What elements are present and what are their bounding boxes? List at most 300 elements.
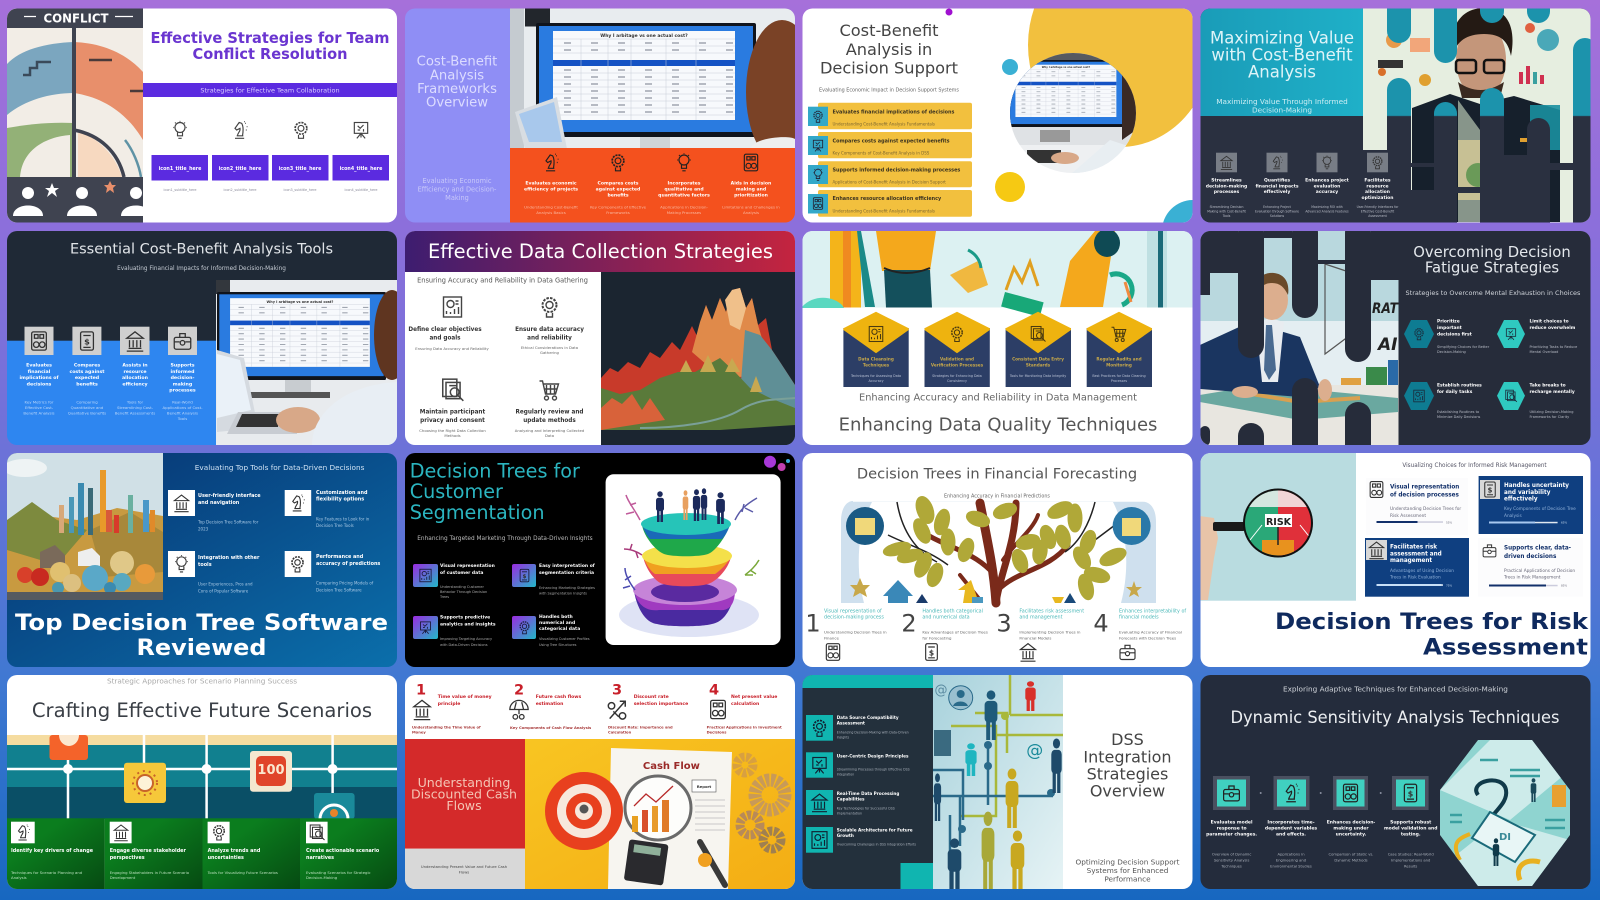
key points: qualitative and — [664, 186, 704, 192]
key points: Regularly review and — [516, 410, 583, 416]
key points: for daily tasks — [1437, 389, 1473, 395]
four diamond cards: Techniques — [863, 362, 890, 367]
sub points: with Segmentation Insights — [539, 592, 587, 596]
key points: Supports — [170, 362, 195, 368]
sub points — [1212, 852, 1434, 868]
key points: Incorporates — [668, 180, 701, 186]
key points — [1206, 178, 1393, 201]
key points: Visual representation — [440, 563, 495, 569]
sub points: Gathering — [540, 350, 560, 355]
cards: Handles uncertainty — [1504, 483, 1569, 489]
list of rows: Applications of Cost-Benefit Analysis in Decision Support — [832, 180, 946, 184]
sub points: with Data-Driven Decisions — [440, 643, 488, 647]
title: Overcoming Decision — [1413, 244, 1571, 261]
list of rows: Enhances resource allocation efficiency — [832, 196, 942, 202]
sub points: Engineering and — [1276, 858, 1306, 862]
key points: tools — [198, 562, 212, 568]
title: Segmentation — [410, 501, 545, 524]
illustration: conflict — [7, 8, 151, 223]
icon subtitles: icon2_subtitle_here — [224, 188, 256, 192]
key points: categorical data — [539, 626, 580, 632]
dark pill overlays — [1200, 220, 1398, 463]
key points: numerical and — [539, 620, 575, 626]
subtitle: Evaluating Economic — [423, 177, 492, 185]
subtitle: Evaluating Economic Impact in Decision Support Systems — [819, 88, 959, 94]
panel: future scenarios — [7, 675, 397, 889]
key points: Visual representation of — [824, 608, 882, 614]
icons — [546, 153, 758, 171]
sub points: Key Components of Effective — [590, 204, 647, 210]
key points: uncertainties — [208, 855, 244, 861]
key points: efficiency — [122, 381, 148, 387]
red title block — [405, 739, 525, 849]
sub points: Prioritizing Tasks to Reduce — [1530, 345, 1577, 349]
sub points — [524, 206, 780, 214]
title: Integration — [1083, 748, 1172, 766]
sub points — [824, 630, 1182, 640]
icons — [414, 700, 725, 720]
cards: 65% — [1561, 520, 1568, 524]
sub points: 2023 — [198, 526, 209, 532]
sub points: Techniques — [1220, 864, 1242, 868]
key points: of customer data — [440, 570, 483, 576]
key points: making under — [1333, 825, 1369, 831]
title: Fatigue Strategies — [1425, 260, 1559, 276]
four diamond cards: Techniques for Assessing Data — [850, 374, 901, 378]
title banner — [405, 231, 795, 272]
key points: resource — [1366, 183, 1389, 189]
four diamond cards: Validation and — [940, 356, 974, 361]
key points: financial models — [1119, 614, 1159, 620]
sub points: Enhancing Project — [1263, 205, 1292, 209]
sub points: Qualitative Benefits — [68, 410, 106, 416]
key points: model validation and — [1384, 825, 1437, 831]
sub points: Cons of Popular Software — [198, 588, 249, 594]
key points: Discount rate — [634, 694, 669, 700]
panel: dynamic sensitivity analysis — [1200, 675, 1590, 889]
key points: allocation — [1365, 189, 1390, 195]
key points: Quantifies — [1264, 178, 1290, 184]
image: octagon isometric analysis: DI — [1499, 832, 1511, 843]
key points: Capabilities — [837, 796, 865, 802]
key points: segmentation criteria — [539, 570, 594, 576]
red title block: Discounted Cash — [411, 786, 517, 802]
sub points: Tools — [177, 416, 187, 421]
sub points: Utilizing Decision-Making — [1530, 410, 1573, 414]
sub points: Minimize Daily Decisions — [1437, 415, 1481, 419]
sub points — [439, 585, 595, 647]
cards: Practical Applications of Decision — [1504, 568, 1575, 574]
photo: monitor with spreadsheet — [510, 8, 795, 148]
key points: Facilitates risk assessment — [1019, 608, 1084, 614]
subtitle: Maximizing Value Through Informed — [1216, 97, 1348, 106]
key points: quantitative factors — [658, 192, 710, 198]
sub points: Environmental Studies — [1270, 864, 1312, 868]
title — [1275, 610, 1590, 660]
four diamond cards: Verification Processes — [931, 362, 984, 367]
four diamond cards: Data Cleansing — [858, 356, 894, 361]
title: Crafting Effective Future Scenarios — [32, 699, 372, 722]
key points: important — [1437, 325, 1462, 331]
key points: update methods — [523, 418, 576, 424]
key points: response to — [1217, 825, 1247, 831]
title: Strategies — [1087, 764, 1168, 784]
decorative circles — [995, 8, 1192, 222]
icons — [168, 490, 311, 577]
icon title boxes: icon3_title_here — [279, 166, 322, 172]
sub points: Benefit Assessments — [115, 410, 155, 416]
sub points: Understanding Customer — [440, 585, 484, 589]
key points: benefits — [607, 192, 629, 198]
sub points: Limitations and Challenges in — [722, 204, 780, 210]
title: Analysis — [430, 68, 484, 84]
subtitle: Enhancing Accuracy and Reliability in Data Management — [859, 393, 1137, 404]
key points: Evaluates economic — [525, 180, 577, 186]
icons — [1213, 776, 1429, 810]
sub points — [197, 516, 374, 594]
title banner: Effective Data Collection Strategies — [428, 240, 773, 263]
sub points: Benefit Analysis — [167, 410, 198, 416]
sub points: Applications in Decision- — [660, 204, 708, 210]
cards: 55% — [1446, 520, 1453, 524]
icon subtitles: icon3_subtitle_here — [284, 188, 316, 192]
sub points: Applications of Cost- — [162, 405, 203, 410]
title: Decision Trees in Financial Forecasting — [857, 465, 1137, 482]
sub points: Enhancing Marketing Strategies — [539, 586, 595, 590]
icons — [24, 327, 197, 355]
key points: allocation — [122, 375, 148, 381]
icons — [413, 564, 536, 639]
sub points: Methods — [444, 433, 461, 438]
key points — [524, 180, 771, 198]
list of rows: Compares costs against expected benefits — [832, 138, 950, 144]
sub points — [10, 870, 371, 880]
key points: dependent variables — [1265, 825, 1317, 831]
key points: Assessment — [837, 720, 865, 726]
green columns — [7, 818, 397, 889]
sub points: Tools for Visualizing Future Scenarios — [207, 870, 278, 875]
list of rows — [808, 103, 972, 217]
sub points: Understanding Decision Trees in — [824, 630, 887, 634]
red title block: Understanding — [418, 775, 510, 790]
key points: financial — [28, 369, 51, 375]
key points: Incorporates time- — [1267, 819, 1315, 825]
key points: and effects. — [1276, 831, 1306, 837]
panel: financial forecasting — [802, 453, 1192, 667]
key points: Identify key drivers of change — [11, 848, 94, 854]
key points: and goals — [429, 336, 461, 342]
key points: parameter changes. — [1206, 831, 1257, 837]
key points: Establish routines — [1437, 382, 1482, 388]
key points: Enhances interpretability of — [1119, 608, 1186, 614]
title: Analysis in — [846, 40, 932, 59]
sub points: Comparing — [76, 400, 98, 404]
sub points: Making Processes — [667, 210, 701, 215]
title: Decision Trees for — [410, 460, 580, 482]
subtitle: Exploring Adaptive Techniques for Enhanced Decision-Making — [1283, 684, 1508, 694]
key points: Handles both — [539, 614, 573, 620]
panel: team conflict resolution — [7, 8, 397, 223]
icons — [806, 715, 833, 853]
sub points: Key Advantages of Decision Trees — [922, 630, 988, 634]
key points: Enhances project — [1305, 178, 1350, 184]
key points: making and — [736, 186, 766, 192]
four diamond cards: Strategies for Enhancing Data — [932, 374, 982, 378]
photo: analyst at monitor — [216, 280, 410, 445]
key points: analytics and insights — [440, 622, 496, 628]
title — [152, 32, 388, 59]
sub points: Applications in — [1277, 852, 1305, 856]
sub points: Assessment — [1368, 214, 1388, 218]
sub points: Tools for — [126, 400, 143, 404]
title: Maximizing Value — [1210, 28, 1354, 47]
sub points: Data — [545, 433, 554, 438]
title: with Cost-Benefit — [1211, 45, 1353, 64]
sub points: Ensuring Data Accuracy and Reliability — [415, 346, 490, 351]
four diamond cards: Standards — [1026, 362, 1051, 367]
key points: calculation — [731, 701, 759, 707]
key points: principle — [438, 701, 460, 707]
key points: privacy and consent — [420, 418, 485, 424]
sub points: Tools — [1222, 214, 1231, 218]
list of rows: Understanding Cost-Benefit Analysis Fundamentals — [832, 208, 935, 214]
panel: DSS integration — [802, 675, 1192, 890]
key points: Prioritize — [1437, 318, 1460, 324]
cards: assessment and — [1390, 551, 1442, 557]
cards: Facilitates risk — [1390, 544, 1437, 550]
key points: reduce overwhelm — [1530, 325, 1576, 331]
sub points — [1208, 206, 1398, 217]
key points: decision-making process — [824, 614, 884, 620]
key points: Supports predictive — [440, 614, 490, 620]
sub points — [837, 730, 916, 847]
title: Analysis — [1248, 63, 1316, 82]
sub points: Overview of Dynamic — [1212, 852, 1251, 856]
title: Conflict Resolution — [192, 45, 348, 63]
photo: businessman at table, cut by pills: AI — [1376, 335, 1397, 355]
panel: maximizing value — [1200, 8, 1590, 222]
key points: Scalable Architecture for Future — [837, 828, 913, 833]
cards: Supports clear, data- — [1504, 546, 1572, 552]
sub points: Results — [1404, 864, 1417, 868]
cards: Advantages of Using Decision — [1390, 568, 1454, 574]
sub points: User-Friendly Interfaces for — [1357, 205, 1399, 209]
illustration: financial tree — [841, 495, 1156, 603]
panel: CBA in decision support — [802, 8, 1192, 222]
key points — [837, 715, 913, 838]
sub points: Choosing the Right Data Collection — [419, 428, 486, 433]
sub points: Visualizing Customer Profiles — [539, 637, 590, 641]
title: Overview — [426, 96, 488, 110]
key points — [19, 362, 196, 394]
key points: Integration with other — [198, 555, 260, 561]
gray subtitle block — [405, 849, 525, 890]
cards: Visual representation — [1390, 484, 1459, 490]
key points: Streamlines — [1211, 178, 1242, 184]
key points — [824, 608, 1186, 620]
sub points: Discount Rate: Importance and — [608, 726, 673, 730]
key points: prioritization — [734, 192, 768, 198]
cards: Key Components of Decision Tree — [1504, 506, 1576, 512]
key points: Define clear objectives — [408, 327, 482, 333]
sub points: Behavior Through Decision — [440, 590, 487, 594]
title: Frameworks — [417, 82, 497, 97]
key points: flexibility options — [316, 496, 364, 502]
subtitle: Enhancing Accuracy in Financial Predictions — [944, 494, 1050, 500]
sub points: Decision Tree Tools — [316, 523, 354, 528]
sub points: Mental Overload — [1530, 350, 1558, 354]
image: network of people: @ — [934, 683, 948, 698]
key points: benefits — [76, 381, 98, 387]
subtitle: Performance — [1104, 874, 1151, 884]
separators — [1260, 792, 1382, 794]
sub points: Quantitative and — [71, 405, 104, 410]
sub points: Streamlining Processes through Effective DSS — [837, 768, 910, 772]
subtitle: Ensuring Accuracy and Reliability in Data Gathering — [417, 276, 588, 284]
sub points: Comparison of Static vs. — [1329, 852, 1373, 856]
icon title boxes: icon1_title_here — [159, 166, 202, 172]
key points: Evaluates model — [1211, 819, 1253, 825]
illustration: conflict: CONFLICT — [44, 12, 109, 26]
subtitle: Strategies to Overcome Mental Exhaustion in Choices — [1406, 289, 1581, 297]
title: Dynamic Sensitivity Analysis Techniques — [1230, 707, 1560, 727]
key points: Performance and — [316, 554, 364, 560]
four diamond cards: Best Practices for Data Cleaning — [1092, 374, 1146, 378]
image: network of people: @ — [1026, 741, 1043, 761]
key points: testing. — [1401, 831, 1421, 837]
sub points: Decision-Making — [1437, 350, 1466, 354]
cards: Analysis — [1504, 513, 1522, 519]
subtitle: Decision-Making — [1252, 106, 1312, 114]
key points: Enhances decision- — [1327, 819, 1375, 825]
list of rows: Understanding Cost-Benefit Analysis Fundamentals — [832, 122, 935, 126]
four diamond cards: Tools for Monitoring Data Integrity — [1009, 374, 1066, 378]
title: Essential Cost-Benefit Analysis Tools — [70, 242, 333, 258]
title — [15, 610, 388, 661]
key points: Customization and — [316, 490, 368, 496]
cards: Trees in Risk Management — [1503, 574, 1561, 580]
key points: selection importance — [634, 701, 688, 707]
sub points: Forecasts with Decision Trees — [1119, 636, 1176, 640]
sub points: Solutions — [1270, 214, 1284, 218]
teal and dark pill overlays — [1387, 8, 1590, 222]
key points: User-Centric Design Principles — [837, 754, 909, 758]
cards: 85% — [1561, 584, 1568, 588]
title: Customer — [410, 480, 503, 503]
key points — [198, 490, 380, 568]
numbers: 4 — [1093, 610, 1109, 638]
key points — [1437, 318, 1576, 395]
icon subtitles: icon4_subtitle_here — [345, 188, 377, 192]
sub points: Top Decision Tree Software for — [197, 520, 259, 524]
sub points: Trees — [439, 595, 449, 599]
icons — [826, 644, 1135, 661]
sub points: Sensitivity Analysis — [1214, 858, 1249, 862]
subtitle: Optimizing Decision Support — [1075, 858, 1180, 867]
key points: Compares costs — [598, 180, 639, 186]
title: Top Decision Tree Software — [15, 610, 388, 636]
sub points: Advanced Analysis Features — [1305, 210, 1349, 214]
subtitle: Strategic Approaches for Scenario Planning Success — [107, 676, 297, 686]
sub points: Key Features to Look for in — [316, 516, 370, 522]
sub points: Evaluating Accuracy of Financial — [1119, 630, 1182, 634]
title: Cost-Benefit — [417, 54, 497, 70]
sub points: Insights — [837, 735, 849, 739]
sub points: Evaluation through Software — [1255, 210, 1299, 214]
numbers — [416, 682, 719, 698]
key points: Ensure data accuracy — [515, 327, 584, 333]
sub points: Comparing Pricing Models of — [316, 580, 374, 586]
subtitle band — [143, 83, 397, 97]
key points: making — [173, 381, 192, 387]
sub points: Using Tree Structures — [539, 643, 577, 647]
key points: Assists in — [122, 362, 148, 368]
sub points: Establishing Routines to — [1437, 410, 1479, 414]
cards: Understanding Decision Trees for — [1390, 506, 1461, 512]
numbers: 1 — [416, 682, 426, 698]
list of rows: Evaluates financial implications of decisions — [832, 110, 955, 116]
key points: User-friendly interface — [198, 493, 261, 499]
subtitle: Evaluating Financial Impacts for Informed Decision-Making — [117, 266, 286, 272]
image: octagon isometric analysis — [1440, 740, 1570, 886]
icons — [443, 297, 558, 401]
image: 3D data mountain — [601, 272, 795, 445]
key points: Engage diverse stakeholder — [110, 848, 186, 854]
key points: and management — [1019, 614, 1063, 620]
four diamond cards: Regular Audits and — [1096, 356, 1142, 361]
sub points: Streamlining Decision — [1210, 205, 1243, 209]
cards: effectively — [1504, 497, 1538, 503]
sub points: User Experiences, Pros and — [198, 582, 253, 586]
key points: uncertainty. — [1336, 831, 1367, 837]
title: Cost-Benefit — [839, 21, 939, 40]
numbers: 3 — [612, 682, 622, 698]
key points: decision- — [171, 375, 194, 381]
illustration: timeline cards — [7, 735, 397, 819]
sub points: Overcoming Challenges in DSS Integration Efforts — [837, 843, 916, 847]
sub points: Analysis Basics — [536, 210, 566, 215]
decorative purple dot — [946, 8, 952, 16]
four diamond cards: Consistency — [947, 379, 967, 383]
sub points: Decision-Making — [306, 875, 338, 880]
key points: Net present value — [731, 694, 777, 700]
sub points — [24, 401, 202, 420]
numbers: 3 — [996, 610, 1012, 638]
icon subtitles — [164, 188, 378, 192]
panel: cost-benefit frameworks — [405, 8, 818, 223]
sub points: Analysis — [743, 210, 759, 215]
key points: Create actionable scenario — [306, 848, 380, 854]
sub points: Decisions — [707, 730, 727, 734]
key points: processes — [169, 388, 196, 394]
icon title boxes: icon4_title_here — [340, 166, 383, 172]
key points: decisions — [27, 381, 52, 387]
key points — [408, 327, 584, 424]
photo: man with icons, cut by pills — [1363, 8, 1591, 222]
subtitle: Systems for Enhanced — [1087, 866, 1168, 875]
key points: Aids in decision — [731, 180, 771, 186]
cards: Trees in Risk Evaluation — [1389, 574, 1441, 580]
key points: and reliability — [527, 336, 572, 342]
sub points: Techniques for Scenario Planning and — [10, 870, 83, 875]
key points — [440, 563, 595, 632]
panel: data quality techniques — [802, 229, 1192, 445]
sub points: Ethical Considerations in Data — [521, 345, 578, 350]
panel: customer segmentation — [405, 453, 795, 667]
cards: driven decisions — [1504, 554, 1557, 560]
key points: Real-Time Data Processing — [837, 791, 899, 796]
key points: Supports robust — [1390, 819, 1432, 825]
